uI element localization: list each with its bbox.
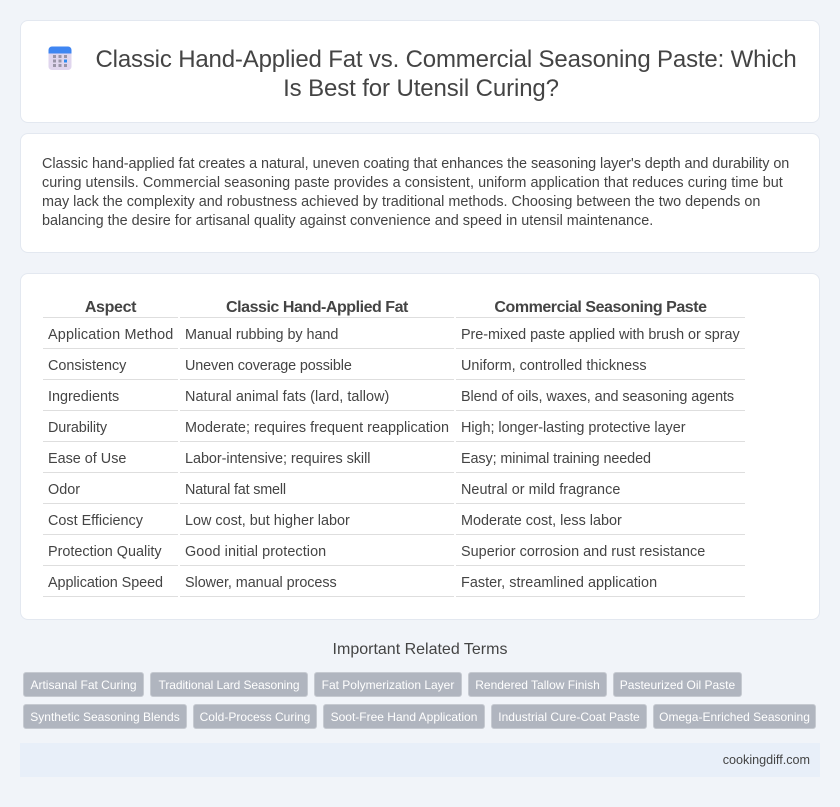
related terms chips: Cold-Process Curing <box>200 710 310 724</box>
comparison table: Durability <box>48 420 107 436</box>
comparison table: Slower, manual process <box>185 575 337 591</box>
comparison table: Natural animal fats (lard, tallow) <box>185 389 389 405</box>
title: Classic Hand-Applied Fat vs. Commercial Seasoning Paste: Which <box>95 46 797 73</box>
comparison table: Application Method <box>48 327 173 343</box>
comparison table: Labor-intensive; requires skill <box>185 451 370 467</box>
comparison table: Manual rubbing by hand <box>185 327 338 343</box>
footer source: cookingdiff.com <box>723 753 810 767</box>
summary text: curing utensils. Commercial seasoning paste provides a consistent, uniform application that reduces curing time but <box>42 175 783 191</box>
header card <box>20 20 820 123</box>
summary text: may lack the complexity and robustness achieved by traditional methods. Choosing between the two depends on <box>42 194 760 210</box>
summary text: Classic hand-applied fat creates a natural, uneven coating that enhances the seasoning layer's depth and durability on <box>42 156 789 172</box>
related terms chips: Omega-Enriched Seasoning <box>659 710 810 724</box>
comparison table: Application Speed <box>48 575 163 591</box>
comparison table: Blend of oils, waxes, and seasoning agents <box>461 389 734 405</box>
comparison table: Consistency <box>48 358 126 374</box>
related terms chips: Synthetic Seasoning Blends <box>30 710 180 724</box>
footer bar <box>20 743 820 777</box>
comparison table: Protection Quality <box>48 544 162 560</box>
related terms chips: Fat Polymerization Layer <box>322 678 454 692</box>
related terms chips <box>23 672 816 729</box>
comparison table: Odor <box>48 482 80 498</box>
comparison table: Good initial protection <box>185 544 326 560</box>
comparison table: High; longer-lasting protective layer <box>461 420 685 436</box>
comparison table: Neutral or mild fragrance <box>461 482 620 498</box>
table header: Commercial Seasoning Paste <box>494 299 707 316</box>
comparison table: Easy; minimal training needed <box>461 451 651 467</box>
title <box>95 46 797 102</box>
comparison table: Moderate; requires frequent reapplication <box>185 420 449 436</box>
related terms chips: Traditional Lard Seasoning <box>159 678 299 692</box>
summary text <box>42 156 789 229</box>
related terms chips: Soot-Free Hand Application <box>331 710 477 724</box>
panel: summary <box>20 133 820 253</box>
related terms heading: Important Related Terms <box>333 641 507 658</box>
title: Is Best for Utensil Curing? <box>283 75 559 102</box>
table header: Classic Hand-Applied Fat <box>226 299 408 316</box>
comparison table: Uneven coverage possible <box>185 358 352 374</box>
comparison table: Uniform, controlled thickness <box>461 358 647 374</box>
table header <box>85 299 707 316</box>
comparison table <box>43 299 745 597</box>
comparison table: Moderate cost, less labor <box>461 513 622 529</box>
comparison table: Pre-mixed paste applied with brush or spray <box>461 327 740 343</box>
summary text: balancing the desire for artisanal quality against convenience and speed in utensil maintenance. <box>42 213 653 229</box>
related terms chips: Pasteurized Oil Paste <box>620 678 735 692</box>
comparison table: Natural fat smell <box>185 482 286 498</box>
related terms chips: Rendered Tallow Finish <box>475 678 600 692</box>
comparison table: Cost Efficiency <box>48 513 143 529</box>
comparison table: Faster, streamlined application <box>461 575 657 591</box>
panel: comparison table <box>20 273 820 620</box>
related terms chips: Artisanal Fat Curing <box>30 678 137 692</box>
comparison table: Ingredients <box>48 389 119 405</box>
icon: calendar <box>48 46 72 70</box>
comparison table: Superior corrosion and rust resistance <box>461 544 705 560</box>
table header: Aspect <box>85 299 136 316</box>
related terms chips: Industrial Cure-Coat Paste <box>498 710 640 724</box>
comparison table: Low cost, but higher labor <box>185 513 350 529</box>
comparison table: Ease of Use <box>48 451 126 467</box>
